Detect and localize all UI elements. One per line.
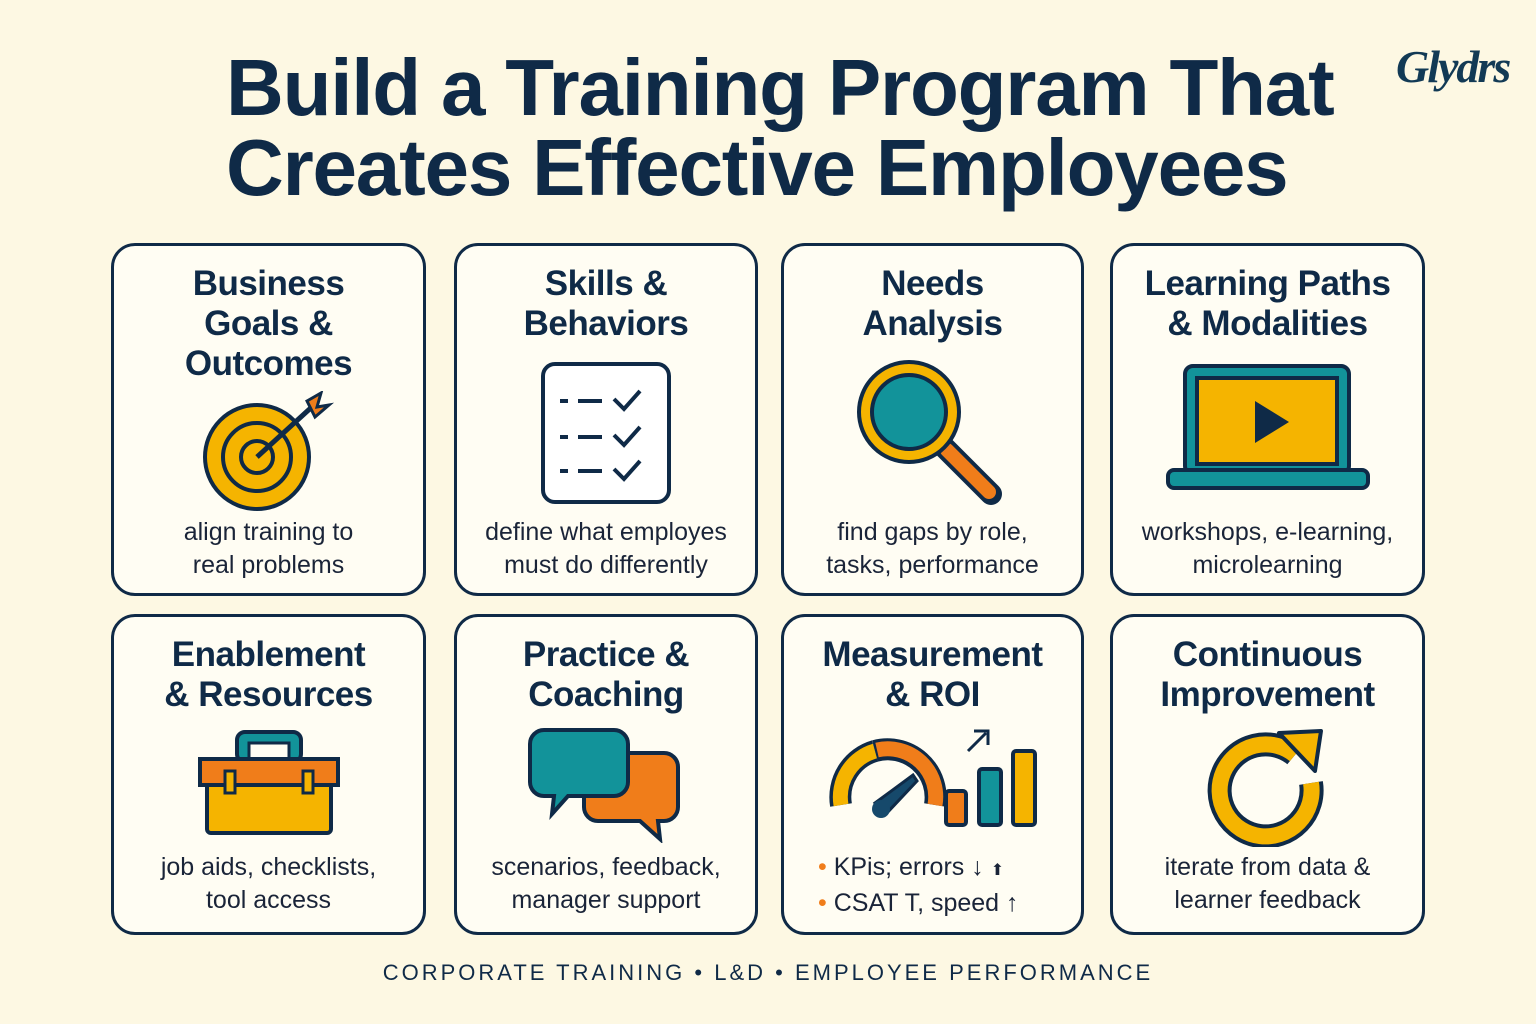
panel: enablement <box>111 614 426 935</box>
description <box>184 518 353 579</box>
description: tasks, performance <box>826 551 1039 579</box>
panel: learning paths <box>1110 243 1425 596</box>
heading: Improvement <box>1160 675 1375 714</box>
heading <box>863 264 1002 343</box>
description: define what employes <box>485 518 727 546</box>
heading: Measurement <box>822 635 1043 674</box>
heading: Needs <box>881 264 984 303</box>
panel: continuous improvement <box>1110 614 1425 935</box>
panel: needs analysis <box>781 243 1084 596</box>
panel: skills <box>454 243 758 596</box>
heading: Analysis <box>863 304 1002 343</box>
icon: gauge and bars <box>829 730 1037 827</box>
description: learner feedback <box>1174 886 1361 914</box>
heading <box>164 635 373 714</box>
heading: Coaching <box>528 675 684 714</box>
logo: Glydrs <box>1396 41 1509 92</box>
description: must do differently <box>504 551 708 579</box>
heading <box>822 635 1043 714</box>
icon: laptop <box>1166 364 1370 490</box>
heading: & Resources <box>164 675 373 714</box>
title <box>226 43 1334 212</box>
heading: Practice & <box>523 635 689 674</box>
heading: & ROI <box>885 675 980 714</box>
heading: & Modalities <box>1167 304 1368 343</box>
description: microlearning <box>1192 551 1343 579</box>
panel: measurement <box>781 614 1084 935</box>
description: iterate from data & <box>1165 853 1370 881</box>
description <box>818 853 1019 917</box>
description: job aids, checklists, <box>161 853 376 881</box>
description: • KPis; errors ↓ ⬆ <box>818 853 1004 881</box>
description: find gaps by role, <box>837 518 1028 546</box>
panel: business goals <box>111 243 426 596</box>
icon: cycle arrow <box>1208 729 1324 847</box>
heading: Business <box>193 264 344 303</box>
description: align training to <box>184 518 353 546</box>
heading <box>1160 635 1375 714</box>
icon: magnifier <box>857 360 1002 505</box>
description: real problems <box>193 551 344 579</box>
description: manager support <box>511 886 700 914</box>
title: Build a Training Program That <box>226 43 1334 132</box>
icon: checklist <box>541 362 671 504</box>
description <box>826 518 1039 579</box>
icon: target <box>203 391 334 511</box>
heading <box>185 264 352 383</box>
description <box>491 853 721 914</box>
title: Creates Effective Employees <box>226 123 1287 212</box>
description: • CSAT T, speed ↑ <box>818 889 1019 917</box>
description <box>160 853 376 914</box>
footer tagline: CORPORATE TRAINING • L&D • EMPLOYEE PERFORMANCE <box>383 960 1153 985</box>
heading <box>1145 264 1390 343</box>
description: scenarios, feedback, <box>491 853 721 881</box>
icon: toolbox <box>198 730 340 835</box>
panel: practice <box>454 614 758 935</box>
heading: Behaviors <box>524 304 688 343</box>
description <box>1165 853 1370 914</box>
heading: Goals & <box>204 304 333 343</box>
icon: speech bubbles <box>528 728 680 843</box>
heading: Outcomes <box>185 344 352 383</box>
description <box>485 518 727 579</box>
heading: Skills & <box>545 264 667 303</box>
description: workshops, e-learning, <box>1142 518 1393 546</box>
heading <box>524 264 688 343</box>
description <box>1142 518 1393 579</box>
heading: Enablement <box>172 635 365 674</box>
heading <box>523 635 689 714</box>
heading: Learning Paths <box>1145 264 1390 303</box>
heading: Continuous <box>1173 635 1362 674</box>
description: tool access <box>206 886 331 914</box>
